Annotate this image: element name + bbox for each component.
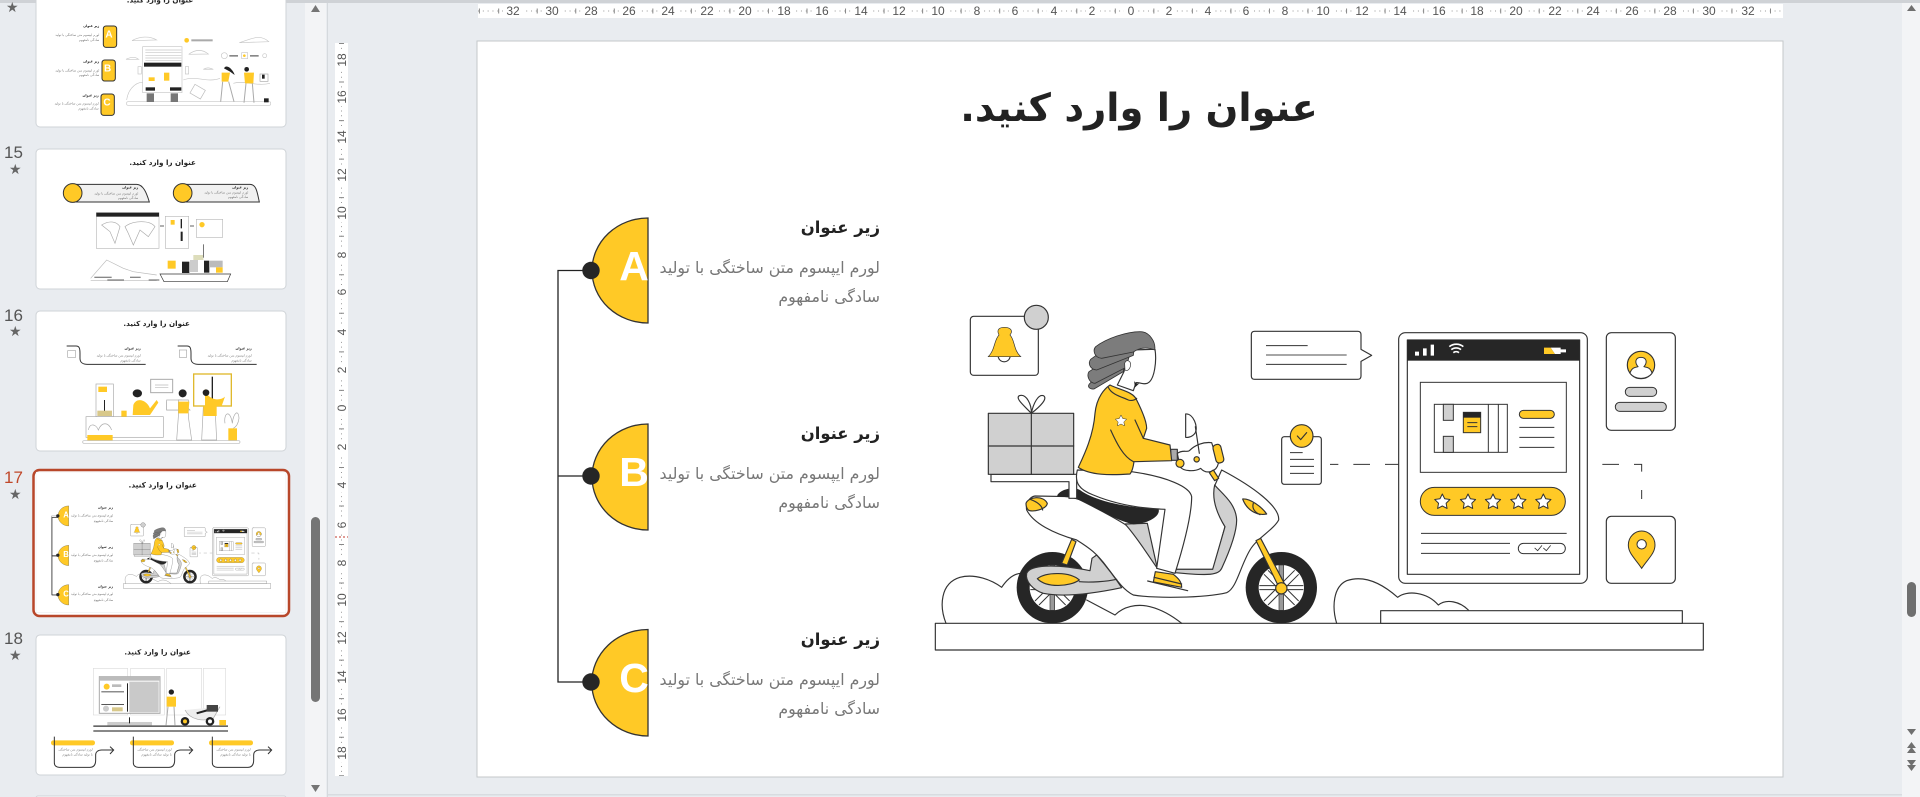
thumbnail 16: لورم ایپسوم متن ساختگی با تولید xyxy=(97,354,141,359)
slide star 17: ★ xyxy=(9,487,22,503)
thumbnail 14: سادگی نامفهوم xyxy=(79,73,100,78)
letter A: A xyxy=(619,243,649,289)
horizontal ruler: 16 xyxy=(1432,4,1446,18)
vertical ruler: 18 xyxy=(335,53,349,67)
horizontal ruler: 10 xyxy=(931,4,945,18)
thumbnail 16: عنوان را وارد کنید. xyxy=(123,319,190,328)
horizontal ruler: 12 xyxy=(892,4,906,18)
thumbnail 15: عنوان را وارد کنید. xyxy=(129,158,196,167)
shipping label xyxy=(1463,412,1481,433)
vertical ruler: 14 xyxy=(335,670,349,684)
rear light xyxy=(1026,498,1047,511)
front shield grey xyxy=(1175,485,1237,575)
front light xyxy=(1243,499,1267,514)
rear wheel xyxy=(1017,552,1088,623)
front hub xyxy=(1276,583,1287,594)
node dot C xyxy=(582,673,600,691)
thumbnail 19 top edge xyxy=(36,796,286,797)
platform xyxy=(1381,611,1682,623)
horizontal ruler: 10 xyxy=(1316,4,1330,18)
thumbnail 18: لورم ایپسوم متن ساختگی xyxy=(217,748,251,753)
thumbnail 14: زیر عنوان xyxy=(83,24,99,28)
handlebar and hand xyxy=(1177,442,1218,472)
horizontal ruler: 24 xyxy=(661,4,675,18)
thumbnail scrollbar xyxy=(311,5,320,792)
thumbnail 16: زیر عنوان xyxy=(125,346,141,350)
road xyxy=(935,623,1703,650)
horizontal ruler: 14 xyxy=(1393,4,1407,18)
background cloud xyxy=(1334,579,1468,623)
wifi icon xyxy=(1449,344,1463,353)
slide star 15: ★ xyxy=(9,162,22,178)
thumbnail 14: لورم ایپسوم متن ساختگی با تولید xyxy=(55,33,99,38)
face xyxy=(1117,349,1156,391)
bottom pane edge xyxy=(328,794,1920,796)
thumbnail 16 xyxy=(36,311,286,451)
thumbnail 18: لورم ایپسوم متن ساختگی xyxy=(59,748,93,753)
vertical ruler: 16 xyxy=(335,708,349,722)
vertical ruler: 10 xyxy=(335,206,349,220)
speech bubble xyxy=(1251,331,1372,379)
thumbnail 14: A xyxy=(105,29,113,40)
rating stars xyxy=(1420,487,1565,515)
horizontal ruler: 4 xyxy=(1205,4,1212,18)
jacket details xyxy=(1108,387,1143,462)
dashed connectors xyxy=(1330,464,1642,499)
hair xyxy=(1088,332,1155,389)
vertical ruler: 16 xyxy=(335,90,349,104)
slide number 17: 17 xyxy=(4,468,23,487)
location card xyxy=(1606,516,1675,583)
thumbnail 14: لورم ایپسوم متن ساختگی با تولید xyxy=(55,101,99,106)
status bar xyxy=(1407,340,1580,361)
horizontal ruler: 30 xyxy=(1702,4,1716,18)
horizontal ruler: 24 xyxy=(1586,4,1600,18)
cuff xyxy=(1171,449,1177,460)
vertical ruler: 10 xyxy=(335,593,349,607)
slide star 16: ★ xyxy=(9,324,22,340)
horizontal ruler: 26 xyxy=(1625,4,1639,18)
thumbnail 15: زیر عنوان xyxy=(122,186,138,190)
front wheel xyxy=(1246,552,1317,623)
user card xyxy=(1606,333,1675,430)
thumbnail 18: با تولید سادگی نامفهوم xyxy=(220,752,251,757)
slide number 16: 16 xyxy=(4,306,23,325)
horizontal ruler: 20 xyxy=(1509,4,1523,18)
thumbnail 15: سادگی نامفهوم xyxy=(228,195,249,200)
body C xyxy=(660,670,880,719)
thumbnail 14: لورم ایپسوم متن ساختگی با تولید xyxy=(55,68,99,73)
vertical ruler: 0 xyxy=(335,404,349,411)
thumbnail 16: سادگی نامفهوم xyxy=(231,358,252,363)
horizontal ruler: 6 xyxy=(1012,4,1019,18)
heading B: زیر عنوان xyxy=(801,424,880,443)
product card xyxy=(1420,382,1566,472)
thumbnail 16: زیر عنوان xyxy=(236,346,252,350)
horizontal ruler: 26 xyxy=(622,4,636,18)
illustration: scooter delivery and app xyxy=(935,305,1703,650)
title: عنوان را وارد کنید. xyxy=(960,86,1318,131)
slide background xyxy=(477,41,1783,777)
horizontal ruler: 2 xyxy=(1166,4,1173,18)
vertical ruler: 12 xyxy=(335,168,349,182)
body B: لورم ایپسوم متن ساختگی با تولید xyxy=(660,464,880,484)
battery icon xyxy=(1544,348,1555,354)
front fork xyxy=(1256,538,1286,589)
thumbnail 16: لورم ایپسوم متن ساختگی با تولید xyxy=(208,354,252,359)
thumbnail 14: سادگی نامفهوم xyxy=(78,106,99,111)
horizontal ruler: 8 xyxy=(1282,4,1289,18)
slide number star 14: ★ xyxy=(6,0,19,16)
vertical scrollbar track xyxy=(1902,3,1920,797)
app scene xyxy=(1330,333,1682,623)
slide number 18: 18 xyxy=(4,629,23,648)
jacket xyxy=(1078,385,1172,475)
body B: سادگی نامفهوم xyxy=(778,493,880,513)
thumbnail 15: لورم ایپسوم متن ساختگی با تولید xyxy=(94,191,138,196)
horizontal ruler: 28 xyxy=(1663,4,1677,18)
thumbnail 14: سادگی نامفهوم xyxy=(79,38,100,43)
vertical ruler: 14 xyxy=(335,130,349,144)
vertical ruler: 2 xyxy=(335,366,349,373)
horizontal ruler: 14 xyxy=(854,4,868,18)
horizontal ruler: 22 xyxy=(700,4,714,18)
vertical ruler: 8 xyxy=(335,559,349,566)
node dot A xyxy=(582,262,600,279)
clipboard xyxy=(1282,425,1321,484)
body A: سادگی نامفهوم xyxy=(778,287,880,307)
heading A: زیر عنوان xyxy=(801,218,880,237)
box carrier xyxy=(991,474,1077,498)
thumbnail scrollbar track xyxy=(305,3,326,797)
jacket star patch xyxy=(1115,415,1127,426)
signal bars xyxy=(1415,345,1434,356)
phone xyxy=(1399,333,1587,583)
order details xyxy=(1421,533,1567,553)
body C: لورم ایپسوم متن ساختگی با تولید xyxy=(660,670,880,690)
thumbnail 15 xyxy=(36,149,286,289)
rear fork xyxy=(1062,539,1076,565)
thumbnail 18: لورم ایپسوم متن ساختگی xyxy=(138,748,172,753)
bell card xyxy=(970,305,1048,375)
horizontal ruler: 8 xyxy=(974,4,981,18)
smile xyxy=(1134,381,1139,387)
shoe xyxy=(1153,572,1182,587)
thumbnail 14: زیر عنوان xyxy=(83,94,99,98)
thumbnail 14: C xyxy=(103,97,111,108)
horizontal ruler: 22 xyxy=(1548,4,1562,18)
thumbnail 15: سادگی نامفهوم xyxy=(118,196,139,201)
connector tree xyxy=(558,270,591,682)
horizontal ruler: 0 xyxy=(1128,4,1135,18)
under-seat grey xyxy=(1125,523,1157,568)
horizontal ruler: 30 xyxy=(545,4,559,18)
thumbnail 14: زیر عنوان xyxy=(83,59,99,63)
letter C: C xyxy=(619,655,649,701)
horizontal ruler: 18 xyxy=(1470,4,1484,18)
horizontal ruler: 18 xyxy=(777,4,791,18)
heading C: زیر عنوان xyxy=(801,630,880,649)
body A: لورم ایپسوم متن ساختگی با تولید xyxy=(660,258,880,278)
vertical ruler: 12 xyxy=(335,631,349,645)
body A xyxy=(660,258,880,307)
node dot B xyxy=(582,467,600,485)
thumbnail 14: B xyxy=(104,63,111,74)
horizontal ruler: 6 xyxy=(1243,4,1250,18)
exhaust detail xyxy=(1037,574,1079,585)
vertical ruler: 4 xyxy=(335,328,349,335)
scooter body xyxy=(1026,470,1279,597)
mirror xyxy=(1186,414,1196,437)
vertical ruler: 18 xyxy=(335,746,349,760)
slide number 15: 15 xyxy=(4,143,23,162)
thumbnail 15: لورم ایپسوم متن ساختگی با تولید xyxy=(204,190,248,195)
seat xyxy=(1057,488,1159,524)
thumbnail 16: سادگی نامفهوم xyxy=(120,358,141,363)
horizontal ruler: 4 xyxy=(1051,4,1058,18)
horizontal ruler: 12 xyxy=(1355,4,1369,18)
pane divider xyxy=(327,3,328,797)
vertical ruler: 6 xyxy=(335,521,349,528)
exhaust grey xyxy=(1026,555,1122,595)
thumbnail 18: با تولید سادگی نامفهوم xyxy=(141,752,172,757)
thumbnail 18: با تولید سادگی نامفهوم xyxy=(62,752,93,757)
letter B: B xyxy=(619,449,649,495)
semicircle B xyxy=(592,424,648,530)
slide thumbnail panel xyxy=(4,0,289,797)
semicircle C xyxy=(592,630,648,736)
main slide scrollbar xyxy=(1907,5,1916,771)
vertical ruler: 2 xyxy=(335,443,349,450)
slide star 18: ★ xyxy=(9,648,22,664)
vertical ruler xyxy=(335,43,349,776)
horizontal ruler: 20 xyxy=(738,4,752,18)
item A xyxy=(582,218,880,323)
vertical ruler: 4 xyxy=(335,481,349,488)
scooter scene xyxy=(935,305,1703,650)
thumbnail 18 xyxy=(36,635,286,775)
vertical ruler: 8 xyxy=(335,251,349,258)
clouds xyxy=(942,573,1182,623)
horizontal ruler: 28 xyxy=(584,4,598,18)
horizontal ruler: 32 xyxy=(1741,4,1755,18)
rider legs xyxy=(1076,470,1192,573)
thumbnail 14 xyxy=(36,0,286,127)
body B xyxy=(660,464,880,513)
horizontal ruler: 32 xyxy=(506,4,520,18)
body C: سادگی نامفهوم xyxy=(778,699,880,719)
ear xyxy=(1125,361,1131,371)
selected slide frame xyxy=(34,470,289,616)
item B xyxy=(582,424,880,530)
yellow pill xyxy=(1519,410,1554,418)
top window edge xyxy=(0,0,1920,3)
horizontal ruler: 16 xyxy=(815,4,829,18)
vertical ruler: 6 xyxy=(335,288,349,295)
semicircle A xyxy=(592,218,648,323)
horizontal ruler: 2 xyxy=(1089,4,1096,18)
thumbnail 18: عنوان را وارد کنید. xyxy=(124,647,191,656)
horizontal ruler xyxy=(478,4,1783,18)
thumbnail 15: زیر عنوان xyxy=(232,186,248,190)
thumbnail 17 selected xyxy=(34,470,289,616)
gift box xyxy=(988,395,1074,474)
item C xyxy=(582,630,880,736)
main slide xyxy=(477,41,1783,777)
